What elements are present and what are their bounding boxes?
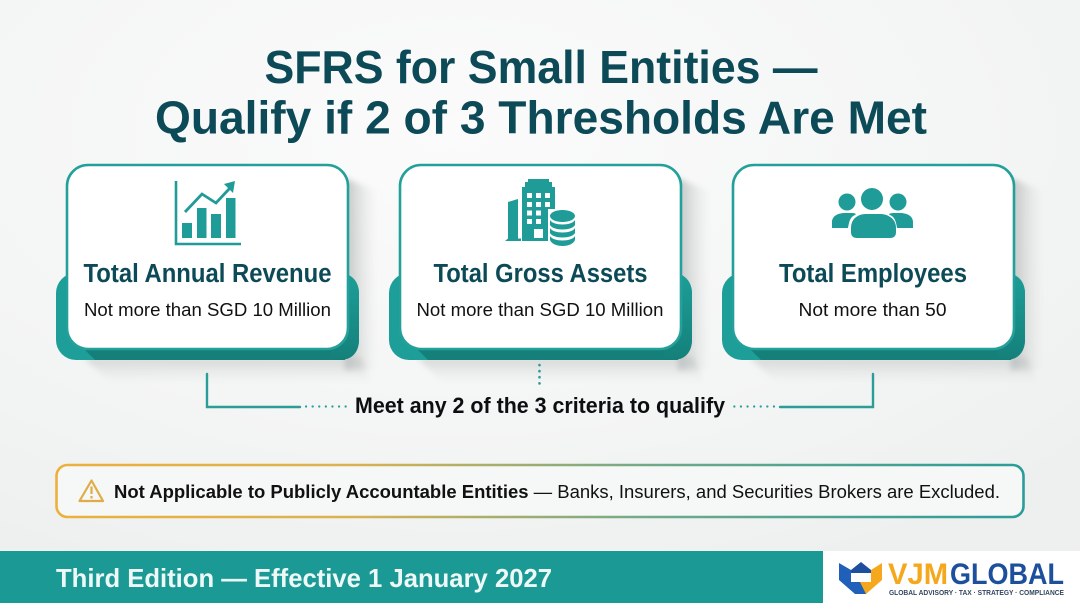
footer band [0,551,823,603]
connector: right bracket [734,374,873,407]
title: Qualify if 2 of 3 Thresholds Are Met [155,92,927,144]
text: employees threshold: Not more than 50 [798,299,946,320]
text: qualification rule: Meet any 2 of the 3 criteria to qualify [355,393,726,418]
heading: total gross assets: Total Gross Assets [434,260,648,288]
text: logo wordmark: VJM [888,558,948,591]
logo: VJM Global: GLOBAL [950,558,1064,591]
text: revenue threshold: Not more than SGD 10 Million [84,299,331,320]
title [155,41,927,144]
icon: logo mark [839,562,882,594]
connector: centre dotted line [538,365,541,389]
connector: left bracket [207,374,346,407]
icon: office building and coins [505,179,578,248]
text: exclusion statement: Not Applicable to Publicly Accountable Entities — Banks, Insurers, and Securities Brokers are Excluded. [114,481,1000,502]
panel: total annual revenue [56,165,378,384]
text: edition and effective date: Third Edition — Effective 1 January 2027 [56,563,552,593]
heading: total employees: Total Employees [779,260,967,288]
icon: rising bar chart [176,181,241,244]
panel: total employees [722,165,1044,384]
panel: total gross assets [389,165,711,384]
title: SFRS for Small Entities — [264,41,818,93]
logo: VJM Global [823,551,1080,603]
icon: group of people [832,188,913,238]
text: assets threshold: Not more than SGD 10 Million [416,299,664,320]
callout: exclusion note [56,465,1024,517]
heading: total annual revenue: Total Annual Revenue [84,260,332,288]
icon: warning triangle [80,480,103,501]
